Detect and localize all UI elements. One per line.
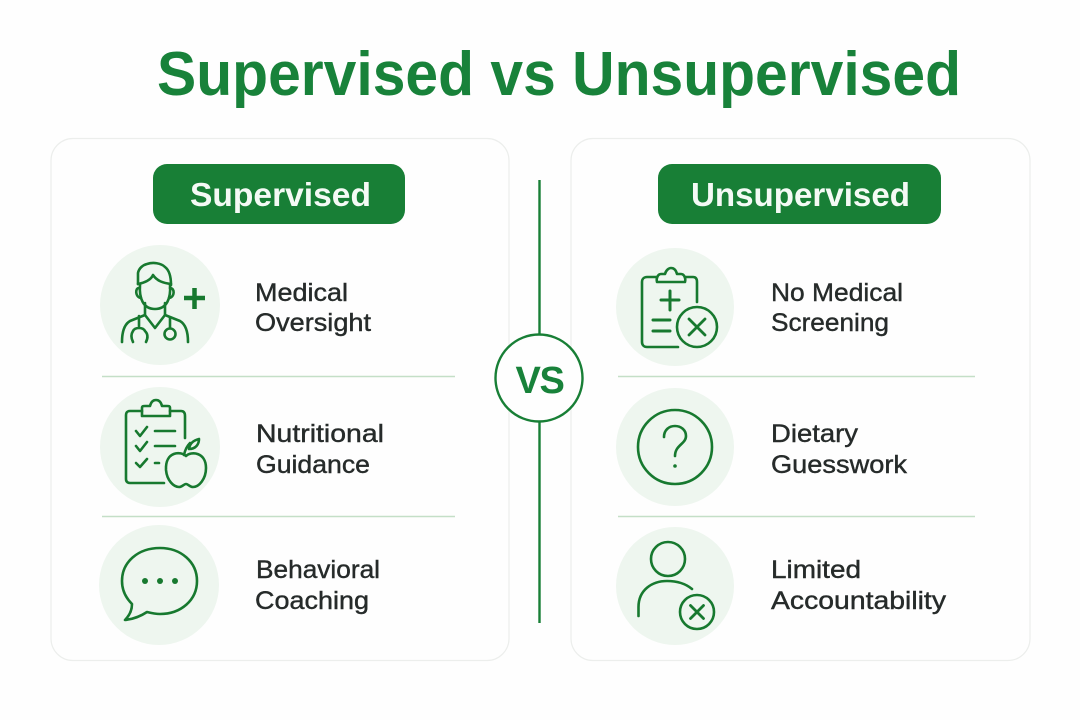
- label: no medical screening: No Medical: [771, 279, 903, 307]
- heading: supervised pill: [153, 164, 405, 224]
- label: limited accountability: Accountability: [771, 587, 947, 615]
- label: nutritional guidance: Nutritional: [256, 420, 384, 448]
- panel: unsupervised: [571, 138, 1030, 660]
- center divider with VS badge: VS: [516, 360, 565, 402]
- icon: clipboard with apple: [100, 387, 220, 507]
- heading: supervised pill: Supervised: [190, 176, 371, 213]
- icon: speech bubble: [99, 525, 219, 645]
- heading: unsupervised pill: [658, 164, 941, 224]
- label: medical oversight: Oversight: [255, 309, 371, 337]
- label: dietary guesswork: Guesswork: [771, 451, 908, 479]
- label: no medical screening: Screening: [771, 309, 889, 337]
- row: behavioral coaching: [99, 525, 380, 645]
- icon: clipboard with x: [616, 248, 734, 366]
- label: dietary guesswork: Dietary: [771, 420, 859, 448]
- label: limited accountability: Limited: [771, 556, 861, 584]
- row: dietary guesswork: [616, 388, 908, 506]
- title: Supervised vs Unsupervised: [157, 40, 961, 109]
- row: no medical screening: [616, 248, 903, 366]
- icon: doctor with plus: [100, 245, 220, 365]
- label: nutritional guidance: Guidance: [256, 451, 370, 479]
- label: behavioral coaching: Behavioral: [256, 556, 380, 584]
- icon: question mark: [616, 388, 734, 506]
- panel: supervised: [51, 138, 509, 660]
- row: limited accountability: [616, 527, 947, 645]
- row: medical oversight: [100, 245, 371, 365]
- center divider with VS badge: [496, 180, 582, 623]
- label: medical oversight: Medical: [255, 279, 348, 307]
- row: nutritional guidance: [100, 387, 384, 507]
- label: behavioral coaching: Coaching: [255, 587, 369, 615]
- heading: unsupervised pill: Unsupervised: [691, 176, 910, 213]
- icon: person with x: [616, 527, 734, 645]
